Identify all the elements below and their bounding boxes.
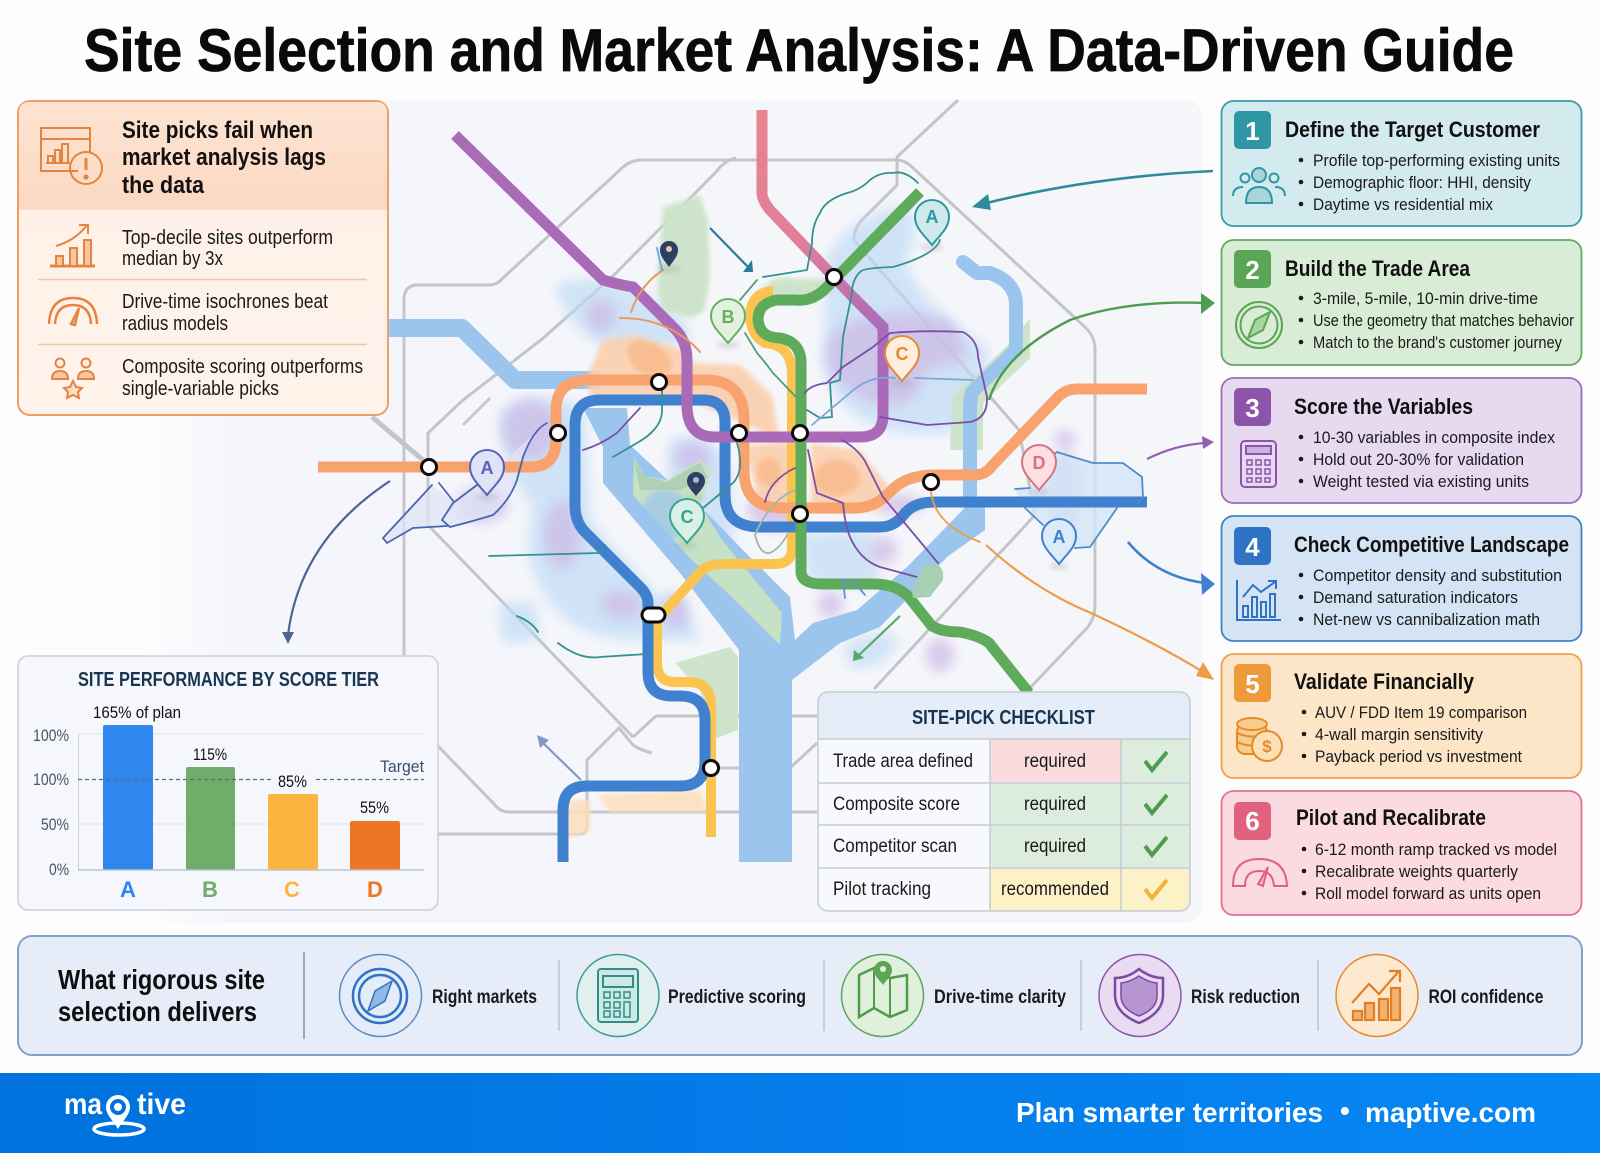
icon: ramp gauge <box>1233 859 1287 886</box>
heat map: purple density <box>456 300 1081 672</box>
badge 2 <box>1234 250 1271 288</box>
icon: customers <box>1233 168 1285 203</box>
chart title: SITE PERFORMANCE BY SCORE TIER <box>78 669 379 691</box>
bar value labels: 85% <box>278 772 307 791</box>
icon: coins: $ <box>1262 737 1272 756</box>
tier labels: D <box>367 877 383 902</box>
icon: calculator <box>1241 441 1276 487</box>
transit stations <box>422 270 938 776</box>
heading 6: Pilot and Recalibrate <box>1296 805 1486 830</box>
map pin: A teal <box>915 200 949 245</box>
bullets 5 <box>1302 703 1527 766</box>
heat map: blue density <box>498 205 988 668</box>
footer tagline: Plan smarter territories <box>1016 1097 1323 1128</box>
heading 2: Build the Trade Area <box>1285 256 1471 281</box>
panel: step 5 validate financially <box>1222 654 1582 778</box>
map pin: A teal: A <box>926 207 938 227</box>
bullets 1: Demographic floor: HHI, density <box>1313 173 1531 192</box>
badge 4: 4 <box>1245 532 1260 562</box>
map patch: green oval <box>912 564 943 598</box>
heading: delivers: What rigorous site <box>58 964 265 995</box>
bar value labels <box>93 703 389 817</box>
icon: browser chart warning <box>41 128 102 184</box>
benefit: drive-time clarity <box>842 954 1066 1036</box>
panel: site-pick checklist <box>818 692 1190 911</box>
small arrow: green <box>853 616 900 661</box>
bullets 2: 3-mile, 5-mile, 10-min drive-time <box>1313 289 1538 308</box>
icon: growth chart <box>1352 971 1400 1020</box>
bullets 1: Profile top-performing existing units <box>1313 151 1560 170</box>
icon: compass <box>1236 302 1282 348</box>
bullets 2: Match to the brand's customer journey <box>1313 333 1562 352</box>
bullets 2 <box>1299 289 1574 352</box>
row: pilot tracking <box>833 879 1167 900</box>
badge 5 <box>1234 664 1271 702</box>
map pin: dark upper <box>660 241 678 267</box>
footer band <box>0 1073 1600 1153</box>
badge 1 <box>1234 111 1271 149</box>
footer tagline: maptive.com <box>1365 1097 1536 1128</box>
row: trade area defined: Trade area defined <box>833 751 973 772</box>
heading 1: Define the Target Customer <box>1285 117 1540 142</box>
heading: site picks fail: Site picks fail when <box>122 117 313 144</box>
tier labels <box>120 877 383 902</box>
badge 4 <box>1234 527 1271 565</box>
bullets 3: Weight tested via existing units <box>1313 472 1529 491</box>
badge 1: 1 <box>1245 116 1260 146</box>
small arrow: teal <box>710 228 753 272</box>
map pin: D red <box>1022 445 1056 490</box>
badge 3: 3 <box>1245 393 1260 423</box>
footer tagline: • <box>1340 1095 1350 1126</box>
bullets 4: Competitor density and substitution <box>1313 566 1562 585</box>
text: drive-time: radius models <box>122 313 228 335</box>
text: top-decile: Top-decile sites outperform <box>122 227 333 249</box>
badge 6 <box>1234 802 1271 840</box>
icon: market chart <box>1237 580 1281 620</box>
heading: delivers: selection delivers <box>58 996 257 1027</box>
tier labels: A <box>120 877 136 902</box>
map patch: green strip <box>633 458 782 645</box>
bullets 6: Recalibrate weights quarterly <box>1315 862 1518 881</box>
badge 2: 2 <box>1245 255 1260 285</box>
text: top-decile <box>122 227 333 270</box>
row: competitor scan: required <box>1024 836 1086 857</box>
row: trade area defined: required <box>1024 751 1086 772</box>
heading: delivers <box>58 964 265 1027</box>
panel: step 3 score the variables <box>1222 378 1582 503</box>
text: composite scoring: Composite scoring outperforms <box>122 356 363 378</box>
bullets 4 <box>1299 566 1562 629</box>
text: composite scoring: single-variable picks <box>122 378 279 400</box>
map pin: C teal: C <box>680 507 694 527</box>
heading 5: Validate Financially <box>1294 669 1475 694</box>
badge 6: 6 <box>1245 806 1260 836</box>
panel: step 1 define the target customer <box>1222 101 1582 226</box>
row: pilot tracking: recommended <box>1001 879 1109 900</box>
connector arrow: step 1 to map <box>972 171 1213 210</box>
heading: site picks fail: market analysis lags <box>122 144 326 171</box>
panel: step 6 pilot and recalibrate <box>1222 791 1582 915</box>
icon: map pin <box>859 961 907 1017</box>
icon: people and star <box>52 358 94 398</box>
icon: speed gauge <box>49 298 97 325</box>
tier labels: C <box>284 877 300 902</box>
row: composite score <box>833 794 1167 815</box>
pin shadows <box>477 243 1069 570</box>
badge 5: 5 <box>1245 669 1260 699</box>
heading 3: Score the Variables <box>1294 394 1473 419</box>
benefit: roi confidence <box>1336 954 1544 1036</box>
benefit: roi confidence: ROI confidence <box>1428 987 1544 1008</box>
row: trade area defined <box>833 751 1167 772</box>
map pin: C teal <box>670 499 704 543</box>
bullets 3: 10-30 variables in composite index <box>1313 428 1555 447</box>
road network <box>372 100 1095 834</box>
bar value labels: 115% <box>193 745 227 764</box>
benefit: risk reduction <box>1099 954 1300 1036</box>
map pin: C orange <box>885 336 919 381</box>
bullets 6: 6-12 month ramp tracked vs model <box>1315 840 1557 859</box>
bar C <box>268 794 318 870</box>
map pin: A blue <box>1042 519 1076 564</box>
bullets 5: AUV / FDD Item 19 comparison <box>1315 703 1527 722</box>
thin isochrones and routes <box>383 172 1143 657</box>
heading: site picks fail <box>122 117 326 199</box>
y axis labels: 100% <box>33 726 69 745</box>
y axis labels: 100% <box>33 770 69 789</box>
bullets 1 <box>1299 151 1560 214</box>
icon: shield <box>1115 969 1163 1023</box>
checklist title: SITE-PICK CHECKLIST <box>912 707 1095 729</box>
y axis labels: 0% <box>49 860 69 879</box>
heat map: orange density <box>566 335 891 838</box>
icon: compass <box>353 969 407 1023</box>
panel: step 2 build the trade area <box>1222 240 1582 365</box>
benefit: right markets <box>340 954 537 1036</box>
panel: why site picks fail <box>18 101 388 415</box>
panel: step 4 check competitive landscape <box>1222 516 1582 641</box>
icon: coins <box>1237 718 1282 761</box>
row: composite score: required <box>1024 794 1086 815</box>
connector arrow: map to chart <box>282 481 390 644</box>
map line: orange <box>318 380 1147 508</box>
text: drive-time <box>122 291 328 335</box>
heading: site picks fail: the data <box>122 172 205 199</box>
heat map: green patches <box>657 195 1030 740</box>
map pin: B green: B <box>722 307 734 327</box>
row: competitor scan: Competitor scan <box>833 836 957 857</box>
text: drive-time: Drive-time isochrones beat <box>122 291 328 313</box>
bullets 6 <box>1302 840 1557 903</box>
small arrow: indigo <box>537 735 581 780</box>
logo: maptive: ma <box>64 1088 102 1121</box>
panel: transit-style market map <box>142 100 1215 923</box>
map pin: D red: D <box>1032 453 1046 473</box>
y axis labels <box>33 726 69 879</box>
footer tagline <box>1016 1095 1536 1128</box>
connector arrow: map to step 4 <box>1128 542 1215 595</box>
bullets 3: Hold out 20-30% for validation <box>1313 450 1524 469</box>
map line: pink <box>762 110 883 327</box>
connector arrow: map to step 5 <box>986 545 1214 680</box>
benefit: right markets: Right markets <box>432 987 537 1008</box>
icon: calculator <box>598 969 638 1022</box>
row: pilot tracking: Pilot tracking <box>833 879 931 900</box>
logo: maptive: tive <box>137 1088 186 1121</box>
row: competitor scan <box>833 836 1167 857</box>
map line: purple <box>455 135 883 437</box>
badge 3 <box>1234 388 1271 426</box>
bullets 3 <box>1299 428 1555 491</box>
benefit: predictive scoring <box>577 954 806 1036</box>
bullets 5: 4-wall margin sensitivity <box>1315 725 1483 744</box>
row: composite score: Composite score <box>833 794 960 815</box>
map pin: C orange: C <box>896 344 908 364</box>
connector arrow: map to step 3 <box>1147 436 1214 459</box>
bullets 4: Net-new vs cannibalization math <box>1313 610 1540 629</box>
bullets 5: Payback period vs investment <box>1315 747 1522 766</box>
bar value labels: 165% of plan <box>93 703 181 722</box>
tier labels: B <box>202 877 218 902</box>
map river: left band and trunk <box>583 408 985 862</box>
bullets 6: Roll model forward as units open <box>1315 884 1541 903</box>
map pin: B green <box>711 299 745 343</box>
benefit: drive-time clarity: Drive-time clarity <box>934 987 1066 1008</box>
target line: Target <box>380 757 424 776</box>
isochrone fill: left pin A <box>383 423 547 543</box>
connector arrow: map to step 2 <box>989 293 1215 400</box>
bar A <box>103 725 153 870</box>
bullets 4: Demand saturation indicators <box>1313 588 1518 607</box>
isochrone fill: right pins <box>1015 452 1143 548</box>
map pin: A blue: A <box>1052 527 1066 547</box>
logo: maptive <box>64 1088 186 1135</box>
map line: blue <box>563 400 1147 862</box>
y axis labels: 50% <box>41 815 69 834</box>
map line: green <box>758 192 1029 693</box>
bar D <box>350 821 400 870</box>
panel: site performance bar chart <box>18 656 438 910</box>
text: top-decile: median by 3x <box>122 248 223 270</box>
panel: what rigorous site selection delivers <box>18 936 1582 1055</box>
bar B <box>186 767 235 870</box>
bullets 1: Daytime vs residential mix <box>1313 195 1493 214</box>
map pin: A indigo: A <box>480 458 494 478</box>
bar value labels: 55% <box>360 798 389 817</box>
benefit: predictive scoring: Predictive scoring <box>668 987 806 1008</box>
map line: light blue river <box>388 262 1016 500</box>
text: composite scoring <box>122 356 363 400</box>
icon: rising bars <box>50 225 95 266</box>
map pin: A indigo <box>470 450 504 495</box>
benefit: risk reduction: Risk reduction <box>1191 987 1300 1008</box>
map pin: dark lower <box>687 472 705 496</box>
map line: yellow <box>657 291 792 837</box>
